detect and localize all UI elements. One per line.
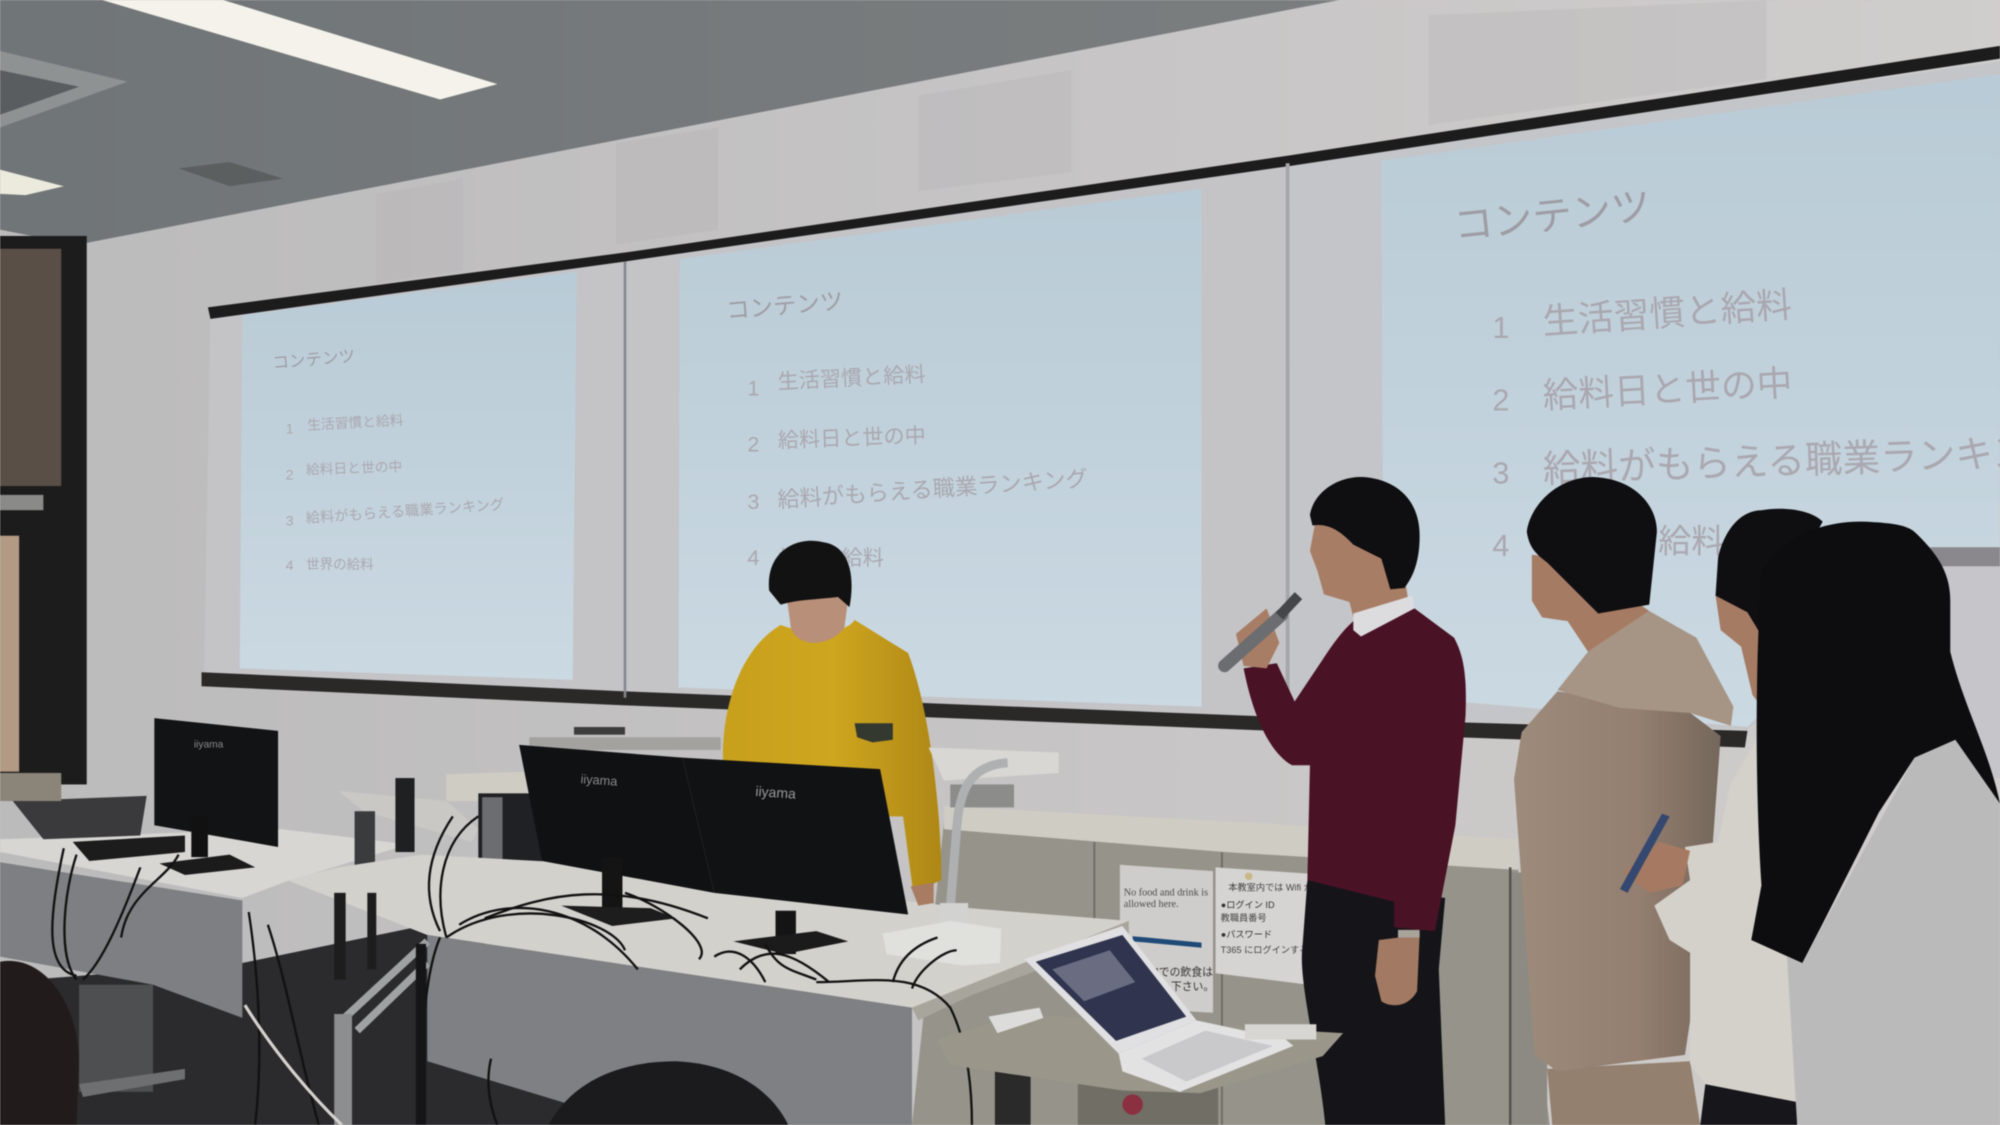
sign: no food and drink xyxy=(1120,865,1214,1013)
long hair woman in white xyxy=(1751,522,2000,1125)
right screen text: 1 xyxy=(1492,311,1509,345)
desk legs xyxy=(334,893,346,980)
center screen text: 4 xyxy=(747,545,760,570)
center rack and monitor arm xyxy=(287,778,1129,1008)
right screen text: 4 xyxy=(1492,529,1509,563)
face and neck xyxy=(1310,517,1408,622)
hair xyxy=(1310,477,1420,589)
flag ornament xyxy=(1122,1094,1143,1115)
desk top xyxy=(0,829,408,898)
left screen text: 生活習慣と給料 xyxy=(307,412,404,433)
hand xyxy=(911,883,934,906)
ceiling vent xyxy=(179,162,283,186)
coat xyxy=(1514,691,1721,1071)
small ceiling light xyxy=(0,170,64,195)
monitor arm xyxy=(334,941,427,1125)
center screen text: 世界の給料 xyxy=(778,546,884,570)
beige hoodie person xyxy=(1514,477,1733,1125)
left screen text: コンテンツ xyxy=(272,346,356,373)
right screen text: 生活習慣と給料 xyxy=(1541,285,1793,342)
right screen text: 給料日と世の中 xyxy=(1542,363,1793,416)
face xyxy=(786,589,849,643)
sign: wifi notice: ●パスワード xyxy=(1221,929,1272,939)
left items: tray and clutter xyxy=(0,773,185,861)
desk leg xyxy=(79,985,153,1092)
hair xyxy=(1751,522,2000,963)
hand xyxy=(1236,608,1279,668)
left screen text xyxy=(272,346,505,573)
chalk tray xyxy=(529,727,721,750)
center screen text: 1 xyxy=(747,375,760,400)
left screen text: 給料がもらえる職業ランキング xyxy=(305,496,505,527)
right screen xyxy=(1381,74,2000,727)
left desk xyxy=(0,829,408,1097)
center screen text: 2 xyxy=(747,432,760,457)
sign: wifi notice: 本教室内では Wifi が使 xyxy=(1228,881,1322,892)
left screen xyxy=(240,272,577,680)
floor xyxy=(0,925,912,1125)
center screen text: コンテンツ xyxy=(725,288,844,324)
right screen text: 2 xyxy=(1492,384,1509,418)
center desk top xyxy=(287,855,1129,1008)
document camera xyxy=(883,747,1059,966)
monitors: center pair: iiyama xyxy=(580,771,619,789)
sign: no food and drink: No food and drink is xyxy=(1124,887,1208,898)
left screen text: 4 xyxy=(286,557,294,573)
laptop xyxy=(1024,926,1316,1092)
foreground heads xyxy=(0,961,788,1125)
center screen text xyxy=(725,288,1089,570)
sweater xyxy=(1654,710,1811,1102)
laptop cart xyxy=(938,1008,1343,1125)
left screen text: 世界の給料 xyxy=(306,557,374,572)
white sweater person xyxy=(1620,509,1823,1125)
sign: no food and drink: 下さい。 xyxy=(1171,980,1214,993)
sign: wifi notice xyxy=(1216,867,1327,985)
monitor: left xyxy=(154,718,278,875)
cable bundle xyxy=(52,816,972,1125)
face and neck xyxy=(1532,555,1649,652)
left screen text: 1 xyxy=(286,421,294,437)
center screen text: 給料日と世の中 xyxy=(777,424,926,453)
left screen text: 給料日と世の中 xyxy=(306,459,403,477)
center screen text: 給料がもらえる職業ランキング xyxy=(777,466,1089,513)
hand xyxy=(1624,842,1690,893)
center screen text: 3 xyxy=(747,489,760,514)
hair xyxy=(1716,509,1823,644)
monitor: left: iiyama xyxy=(194,739,224,750)
screen frame bars xyxy=(202,46,2000,747)
cabinets xyxy=(446,772,1550,1125)
upper wall panels xyxy=(376,0,1767,283)
projection screen housings xyxy=(204,61,2000,730)
monitors: center pair xyxy=(519,745,908,954)
lower hand xyxy=(1375,935,1420,1005)
right screen text xyxy=(1452,184,2000,563)
right screen text: 給料 xyxy=(1658,523,1724,560)
ceiling light strip xyxy=(102,0,497,99)
left screen text: 3 xyxy=(286,513,294,529)
left screen text: 2 xyxy=(286,467,294,483)
ceiling xyxy=(0,0,1339,245)
yellow person: presenter at computer xyxy=(723,541,941,906)
front desk panel xyxy=(427,921,1129,1125)
burgundy person: speaker with microphone xyxy=(1224,477,1466,1125)
hair xyxy=(1527,477,1657,614)
right screen text: コンテンツ xyxy=(1452,184,1653,249)
trousers xyxy=(1302,880,1445,1125)
center screen text: 生活習慣と給料 xyxy=(777,362,926,394)
yellow fleece xyxy=(723,620,941,893)
sign: wifi notice: ●ログイン ID xyxy=(1221,899,1275,910)
face xyxy=(1716,561,1779,707)
white cable xyxy=(245,1005,342,1125)
sign: no food and drink: 内での飲食は xyxy=(1148,965,1213,979)
microphone xyxy=(1224,596,1298,666)
center screen xyxy=(679,189,1202,707)
sign: wifi notice: T365 にログインする時と xyxy=(1221,944,1327,955)
modesty panel xyxy=(0,862,242,1018)
sweater xyxy=(1787,740,2000,1125)
monitors: center pair: iiyama xyxy=(755,783,797,802)
whiteboard at far right xyxy=(1930,547,2000,778)
collar xyxy=(1353,596,1415,636)
hair xyxy=(769,541,852,607)
sign: no food and drink: allowed here. xyxy=(1124,899,1179,910)
sweater xyxy=(1244,608,1466,931)
air conditioner vent xyxy=(0,51,128,128)
door frame left xyxy=(0,236,87,784)
right screen text: 3 xyxy=(1492,456,1509,490)
pen xyxy=(1620,814,1670,893)
hood xyxy=(1557,611,1733,726)
sign: wifi notice: 教職員番号 xyxy=(1221,912,1267,923)
trousers xyxy=(1547,1061,1700,1125)
